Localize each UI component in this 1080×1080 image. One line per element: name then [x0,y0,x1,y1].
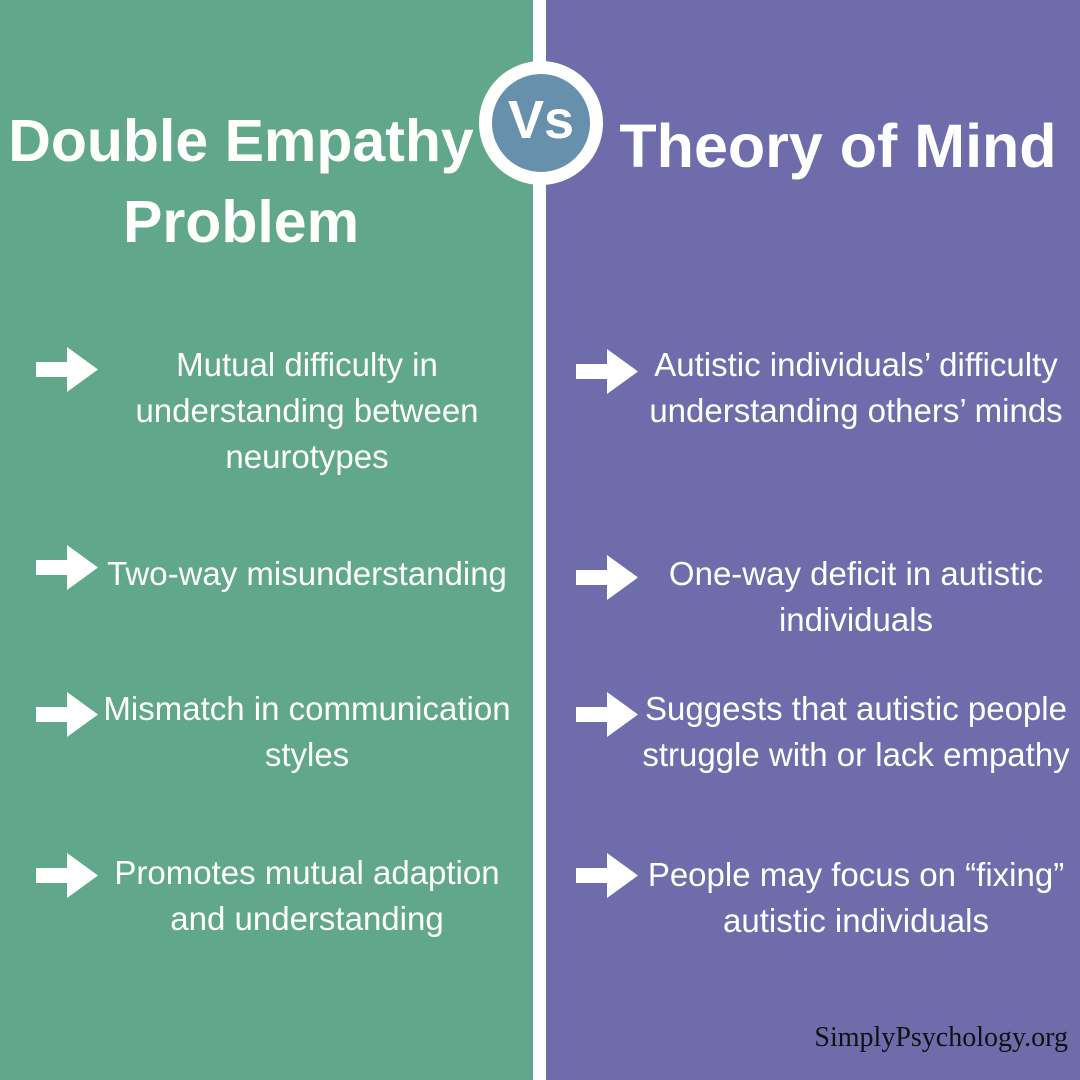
heading: left: Problem [123,189,359,255]
text: left 1 [135,346,479,475]
panel: right purple [546,0,1080,1080]
arrow: left 1 [36,347,98,392]
heading: right: Theory of Mind [619,112,1057,180]
heading: left [8,108,474,255]
text: right 2: One-way deficit in autistic [669,555,1043,592]
arrow: right 1 [576,349,638,394]
text: left 1: Mutual difficulty in [176,346,438,383]
heading: left: Double Empathy [8,108,474,174]
text: left 4: and understanding [170,900,444,937]
text: left 3: styles [265,736,349,773]
text: right 2: individuals [779,601,933,638]
arrow: left 3 [36,692,98,737]
panel: left green [0,0,533,1080]
text: left 1: neurotypes [225,438,389,475]
text: left 2: Two-way misunderstanding [107,555,507,592]
text: right 3: Suggests that autistic people [645,690,1067,727]
text: right 3: struggle with or lack empathy [642,736,1070,773]
footer: brand: SimplyPsychology.org [814,1022,1068,1053]
text: right 1 [649,346,1063,429]
icon: vs circle [479,61,603,185]
text: left 1: understanding between [135,392,479,429]
text: right 2 [669,555,1043,638]
text: right 1: Autistic individuals’ difficulty [654,346,1058,383]
text: left 3 [103,690,511,773]
text: right 4: autistic individuals [723,902,989,939]
arrow: right 4 [576,853,638,898]
text: right 3 [642,690,1070,773]
text: right 1: understanding others’ minds [649,392,1063,429]
text: left 4: Promotes mutual adaption [114,854,500,891]
arrow: right 2 [576,555,638,600]
icon: vs circle: Vs [508,90,574,150]
text: left 4 [114,854,500,937]
arrow: left 2 [36,545,98,590]
text: right 4: People may focus on “fixing” [648,856,1064,893]
arrow: left 4 [36,853,98,898]
text: right 4 [648,856,1064,939]
arrow: right 3 [576,692,638,737]
text: left 3: Mismatch in communication [103,690,511,727]
